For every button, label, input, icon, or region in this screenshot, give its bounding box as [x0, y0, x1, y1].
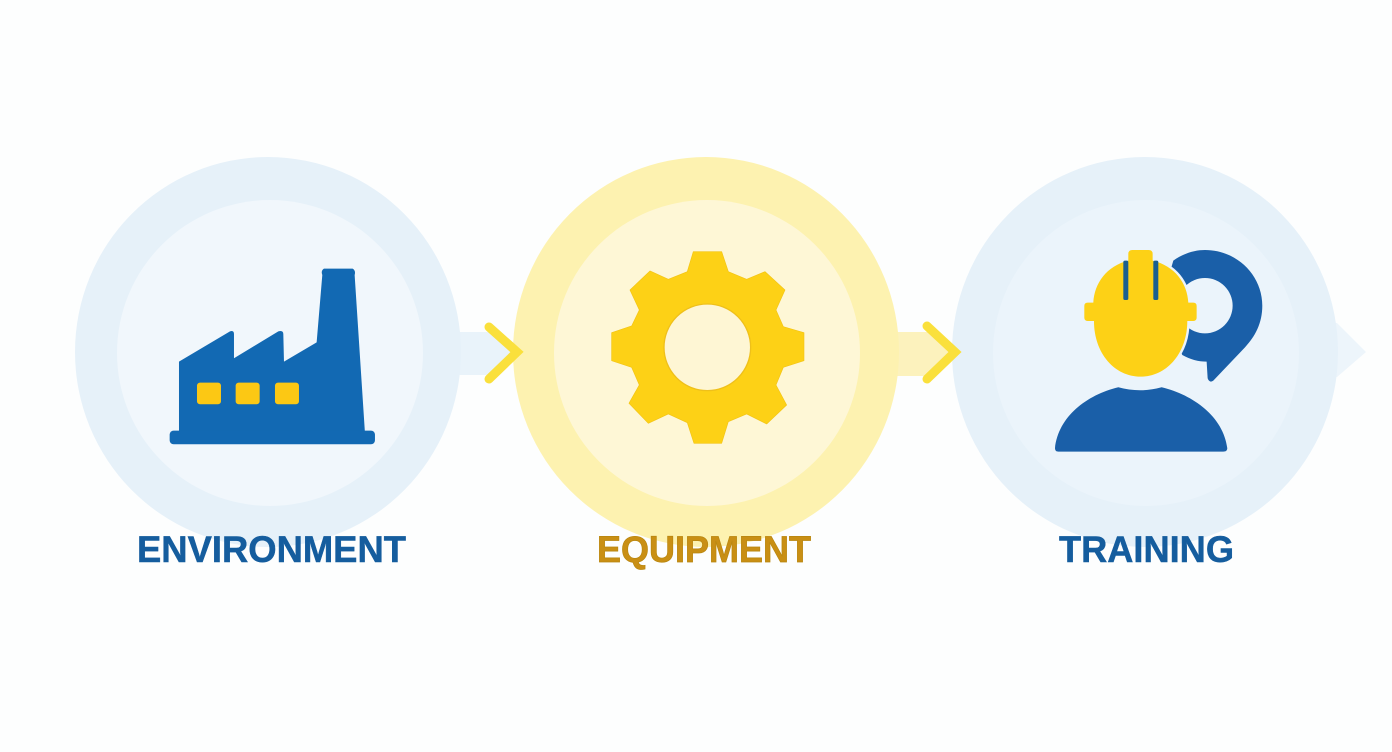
arrow tip: training	[1330, 323, 1366, 377]
connector: environment to equipment	[450, 332, 517, 375]
outer circle: environment	[75, 157, 461, 547]
outer circle: training	[952, 157, 1338, 547]
heading: training: TRAINING	[1059, 529, 1234, 570]
arrow: chevron to training	[927, 326, 955, 379]
icon: worker with speech bubble	[1055, 250, 1262, 452]
panel: training	[952, 157, 1366, 570]
inner circle: training	[993, 200, 1299, 506]
inner circle: environment	[117, 200, 423, 506]
icon: factory	[170, 269, 375, 444]
heading: equipment: EQUIPMENT	[597, 529, 811, 570]
connector: equipment to training	[890, 332, 955, 376]
outer circle: equipment	[513, 157, 899, 547]
panel: environment	[75, 157, 517, 570]
icon: gear	[612, 252, 804, 443]
inner circle: equipment	[554, 200, 860, 506]
panel: equipment	[513, 157, 955, 570]
heading: environment: ENVIRONMENT	[137, 529, 406, 570]
arrow: chevron to equipment	[489, 327, 517, 379]
